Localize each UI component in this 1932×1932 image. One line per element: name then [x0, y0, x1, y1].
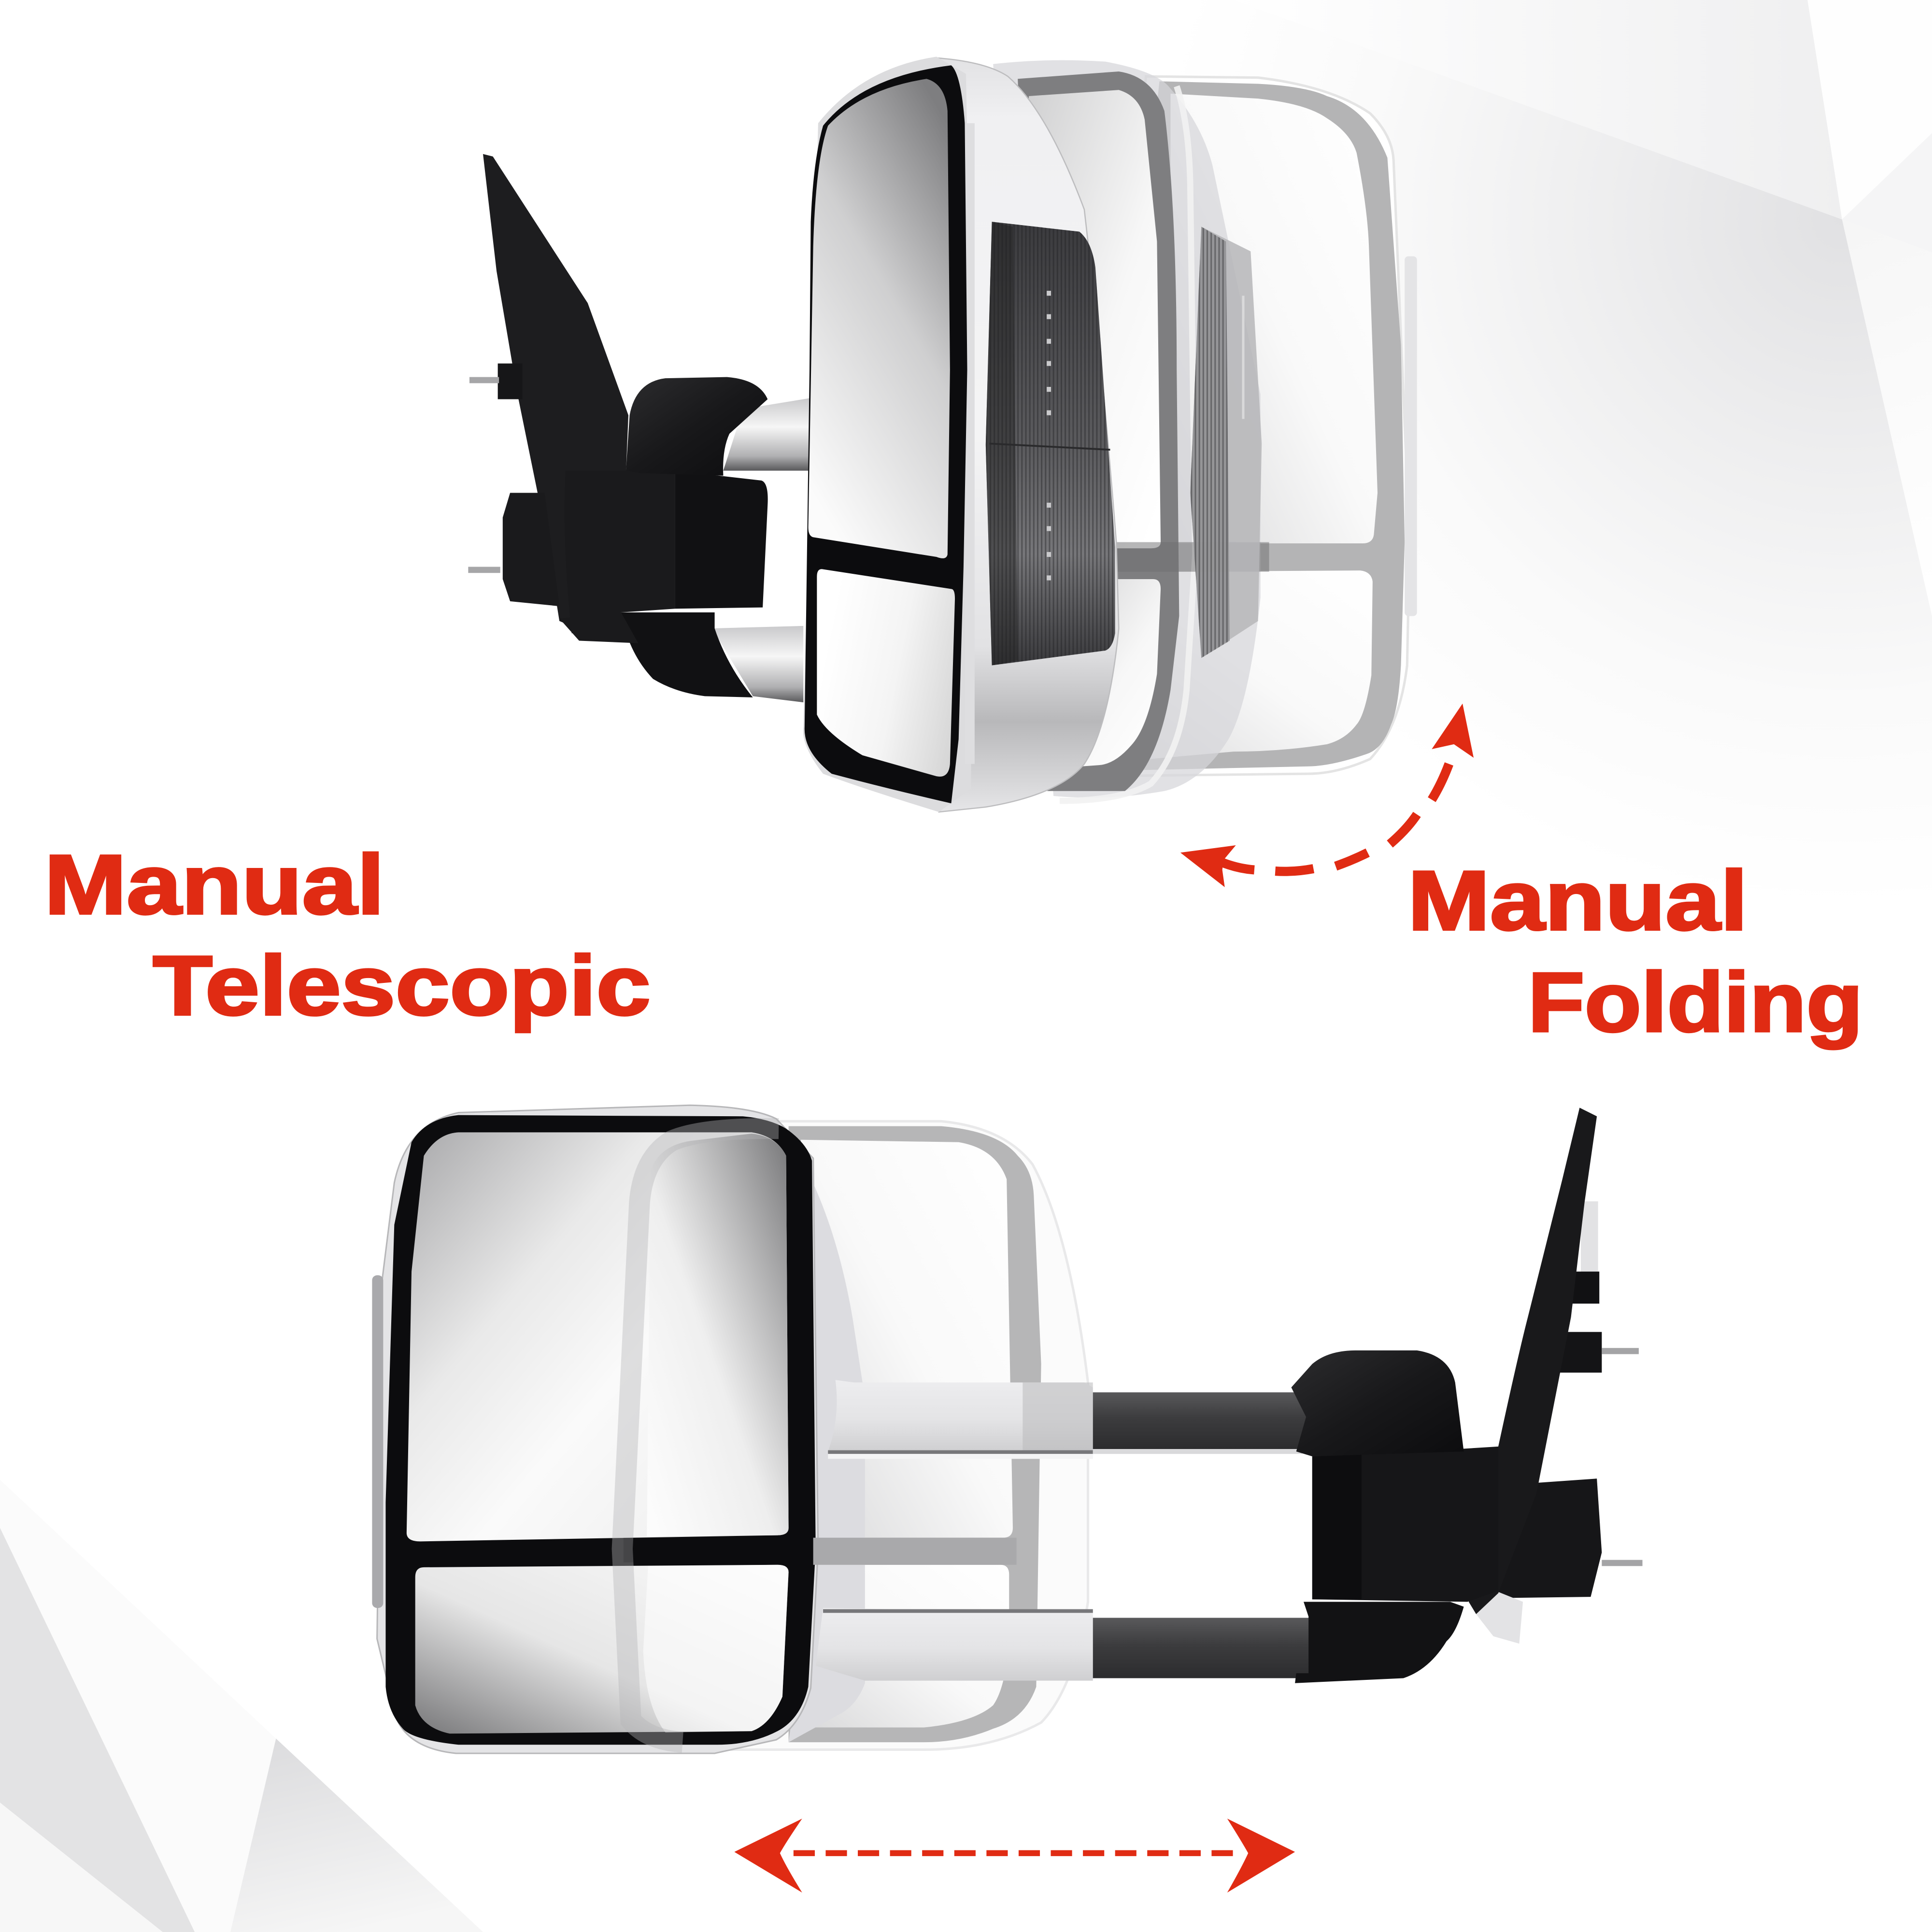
LED dots	[1047, 291, 1051, 581]
divider through ghost	[813, 1538, 1017, 1565]
upper chrome sleeve	[828, 1380, 1093, 1451]
lower chrome tube	[712, 626, 803, 702]
bottom mirror: telescopic arm	[789, 1108, 1643, 1742]
arrow: folding curved dashed	[1180, 704, 1474, 887]
bottom mirror: ghost position	[690, 1121, 1088, 1749]
upper cap	[1291, 1350, 1464, 1456]
upper mirror glass	[808, 79, 950, 558]
heading: Manual Folding	[1408, 854, 1863, 1050]
chrome rim	[377, 1105, 818, 1753]
ghost frame	[789, 1126, 1041, 1742]
lower mirror glass	[817, 569, 955, 777]
top mirror: turn signal lens	[986, 222, 1115, 666]
lower black tube	[1093, 1618, 1312, 1678]
rear chrome housing	[789, 1170, 865, 1742]
arm block	[565, 470, 675, 633]
top right facet band	[1109, 0, 1932, 937]
upper black tube	[1093, 1392, 1312, 1449]
heading: Manual Folding: Manual	[1408, 854, 1748, 948]
rear blocks and studs	[1476, 1201, 1643, 1644]
ghost lower glass	[801, 1565, 1009, 1728]
lower arm cap	[621, 612, 753, 697]
top mirror: front chrome housing	[803, 57, 1119, 812]
arrow: telescopic double-headed dashed	[734, 1818, 1295, 1892]
top mirror: telescopic arm and bracket	[468, 154, 811, 702]
lower cap	[1295, 1602, 1464, 1683]
ghost upper glass	[801, 1140, 1013, 1538]
top mirror: farthest ghost position	[1084, 76, 1417, 776]
mounting plate	[1469, 1108, 1597, 1614]
bottom left light facet	[0, 1480, 483, 1932]
arm block	[1312, 1447, 1498, 1602]
ghost housing	[690, 1121, 1088, 1749]
heading: Manual Folding: Folding	[1528, 955, 1863, 1050]
top mirror: middle ghost position	[993, 60, 1269, 801]
lower chrome sleeve	[816, 1608, 1093, 1681]
upper chrome tube	[723, 398, 811, 470]
bottom mirror: front glass and frame	[372, 1105, 1017, 1753]
mounting bracket	[483, 154, 628, 628]
lower glass	[415, 1565, 789, 1733]
ghost frame seen through glass	[622, 1129, 779, 1742]
heading: Manual Telescopic	[44, 838, 651, 1033]
rear mounting blocks and studs	[468, 364, 559, 606]
heading: Manual Telescopic: Telescopic	[153, 939, 651, 1033]
bottom left grey facet	[230, 1738, 483, 1932]
ghost turn signal lens	[1190, 227, 1262, 658]
upper glass	[407, 1132, 789, 1541]
overlap shading	[647, 1134, 789, 1536]
upper arm cap	[626, 377, 767, 476]
black glass frame	[805, 65, 967, 803]
black frame	[385, 1115, 816, 1745]
heading: Manual Telescopic: Manual	[44, 838, 384, 932]
